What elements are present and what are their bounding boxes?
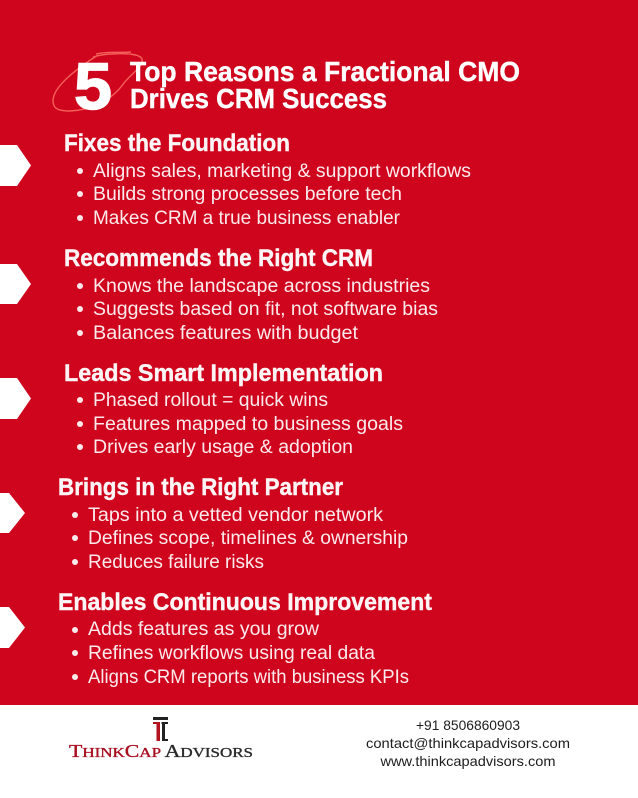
heading 1: Fixes the Foundation (64, 130, 290, 157)
contact details (366, 717, 570, 769)
bullet list 3: Drives early usage & adoption (93, 437, 353, 458)
bullet list 3 (77, 390, 403, 458)
bullet list 4: Reduces failure risks (88, 552, 264, 573)
bullet list 2 (77, 276, 438, 344)
arrow marker 1 (0, 145, 31, 186)
bullet list 1: Makes CRM a true business enabler (93, 208, 401, 229)
bullet list 2: Suggests based on fit, not software bias (93, 299, 438, 320)
bullet list 5: Aligns CRM reports with business KPIs (88, 667, 409, 688)
section 4: Brings in the Right Partner (0, 474, 408, 573)
logo: ThinkCap Advisors (69, 717, 253, 761)
footer background (0, 705, 638, 798)
contact details: contact@thinkcapadvisors.com (366, 735, 570, 751)
heading 4: Brings in the Right Partner (58, 474, 343, 501)
bullet list 5: Refines workflows using real data (88, 643, 375, 664)
bullet list 1: Aligns sales, marketing & support workflows (93, 161, 471, 182)
bullet list 1 (77, 161, 471, 229)
bullet list 3: Phased rollout = quick wins (93, 390, 328, 411)
contact details: www.thinkcapadvisors.com (379, 753, 556, 769)
bullet list 2: Balances features with budget (93, 323, 359, 344)
bullet list 1: Builds strong processes before tech (93, 184, 402, 205)
title block: Drives CRM Success (130, 83, 387, 114)
section 1: Fixes the Foundation (0, 130, 471, 229)
bullet list 2: Knows the landscape across industries (93, 276, 430, 297)
logo mark (153, 717, 168, 741)
arrow marker 4 (0, 493, 25, 533)
bullet list 5 (72, 619, 409, 688)
bullet list 4: Defines scope, timelines & ownership (88, 528, 408, 549)
title block (53, 49, 520, 123)
heading 2: Recommends the Right CRM (64, 245, 373, 272)
big number 5: 5 (74, 49, 112, 123)
contact details: +91 8506860903 (416, 717, 520, 733)
heading 5: Enables Continuous Improvement (58, 589, 432, 616)
hand-drawn ellipse around number (53, 52, 142, 111)
bullet list 4: Taps into a vetted vendor network (88, 505, 384, 526)
arrow marker 2 (0, 264, 31, 304)
arrow marker 5 (0, 607, 25, 648)
bullet list 5: Adds features as you grow (88, 619, 319, 640)
heading 3: Leads Smart Implementation (64, 360, 383, 387)
bullet list 3: Features mapped to business goals (93, 414, 403, 435)
arrow marker 3 (0, 378, 31, 419)
title text: Top Reasons a Fractional CMO (130, 56, 520, 87)
section 3: Leads Smart Implementation (0, 360, 403, 458)
section 2: Recommends the Right CRM (0, 245, 438, 344)
logo wordmark: THINK CAP ADVISORS (69, 741, 253, 761)
bullet list 4 (72, 505, 408, 573)
section 5: Enables Continuous Improvement (0, 589, 432, 688)
